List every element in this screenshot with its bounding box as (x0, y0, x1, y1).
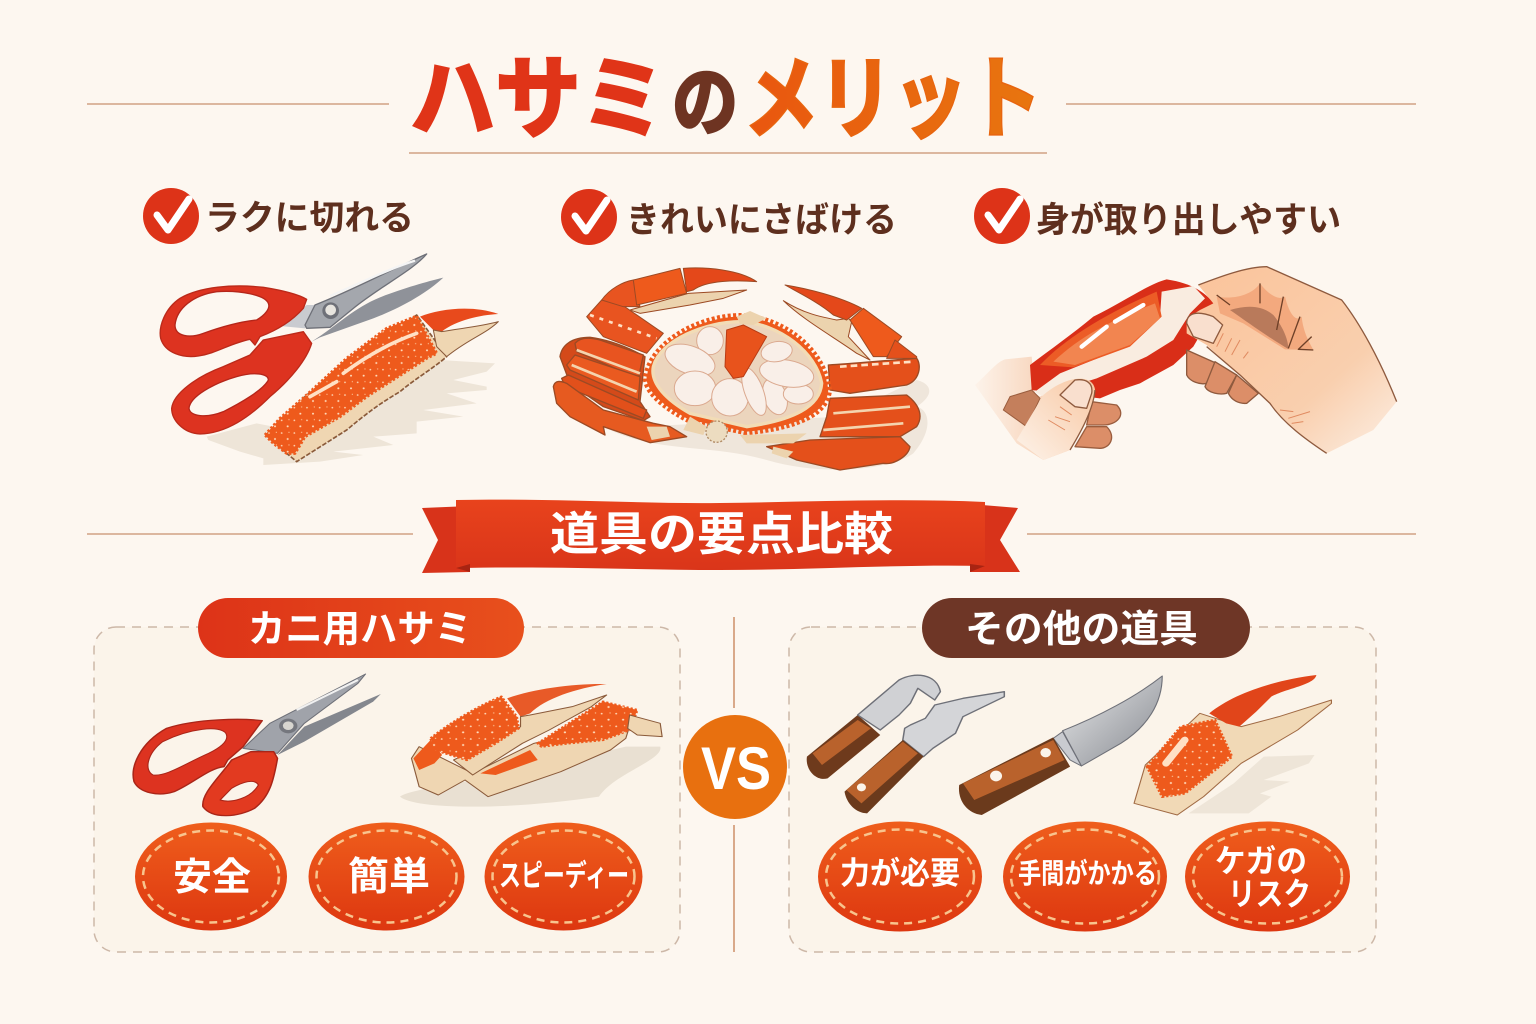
pill heading: その他の道具 (922, 598, 1250, 658)
badge: ケガのリスク: リスク (1228, 876, 1311, 912)
badge: 簡単 (308, 822, 464, 930)
illustration: cut crab claw (400, 684, 662, 807)
illustration: opened snow crab (553, 268, 929, 470)
panel: カニ用ハサミ (94, 598, 680, 952)
badge: スピーディー (484, 822, 642, 930)
badge: 手間がかかる (1003, 822, 1167, 932)
badge: スピーディー: スピーディー (499, 859, 629, 893)
illustration: hands pulling crab meat (975, 267, 1397, 460)
pill heading: その他の道具: その他の道具 (965, 609, 1198, 651)
section ribbon: 道具の要点比較 (87, 500, 1416, 573)
badge: 力が必要: 力が必要 (840, 856, 960, 891)
title: ハサミのメリット: ハサミ (410, 50, 666, 150)
vs divider (683, 617, 787, 952)
title: ハサミのメリット: メリット (744, 50, 1042, 150)
icon: crab cracker (807, 675, 1004, 813)
vs divider: VS (701, 735, 771, 802)
section ribbon: 道具の要点比較: 道具の要点比較 (550, 508, 893, 560)
icon: knife (959, 676, 1162, 815)
merit 3: heading 身が取り出しやすい (974, 188, 1341, 244)
merit 2: heading きれいにさばける (561, 189, 897, 245)
badge: 力が必要 (818, 822, 982, 932)
illustration: scissors and crab leg (160, 254, 498, 465)
title: ハサミのメリット (410, 50, 1042, 150)
title: ハサミのメリット: の (672, 61, 738, 146)
badge: ケガのリスク (1185, 822, 1350, 932)
badge: 安全: 安全 (173, 857, 251, 899)
panel: その他の道具 (789, 598, 1376, 952)
icon: red scissors (133, 674, 381, 816)
merit 2: heading きれいにさばける: きれいにさばける (626, 201, 897, 240)
pill heading: カニ用ハサミ (198, 598, 524, 658)
merit 1: heading ラクに切れる (143, 188, 414, 244)
merit 3: heading 身が取り出しやすい: 身が取り出しやすい (1036, 201, 1341, 240)
badge: ケガのリスク: ケガの (1215, 843, 1307, 879)
badge: 安全 (135, 822, 287, 930)
merit 1: heading ラクに切れる: ラクに切れる (205, 199, 414, 238)
illustration: crab claw (1134, 675, 1331, 815)
badge: 手間がかかる: 手間がかかる (1018, 857, 1157, 889)
badge: 簡単: 簡単 (348, 856, 430, 899)
pill heading: カニ用ハサミ: カニ用ハサミ (248, 609, 472, 651)
